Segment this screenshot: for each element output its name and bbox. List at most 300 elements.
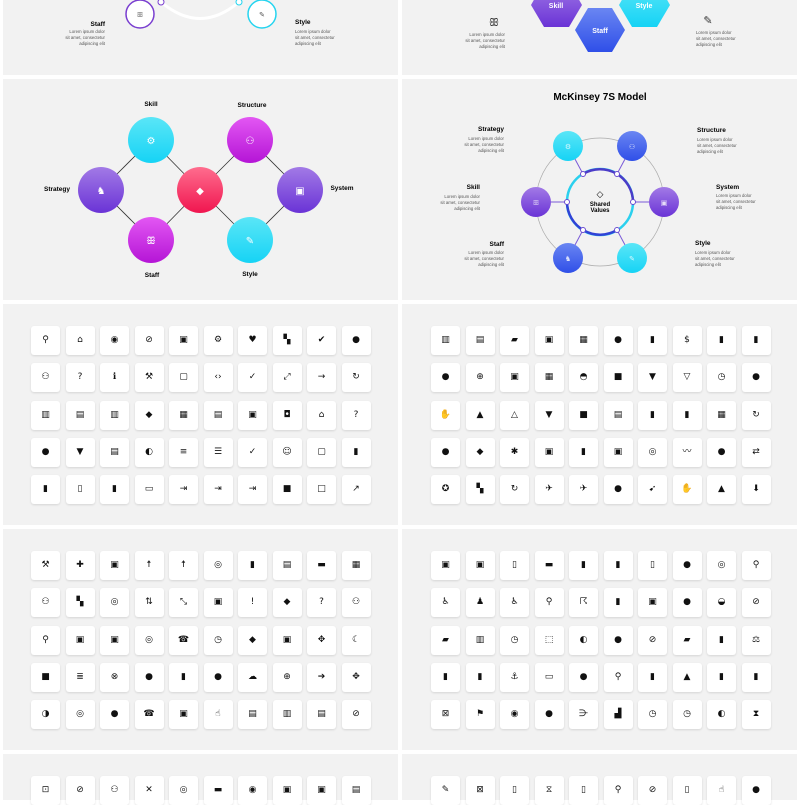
- icon grid 3: ☁: [248, 672, 257, 682]
- icon grid 2: ▣: [545, 335, 553, 345]
- icon grid 4: ▮: [616, 560, 620, 570]
- icon grid 4: ⚲: [615, 672, 621, 682]
- McKinsey 7S model: Lorem ipsum dolor: [468, 136, 505, 141]
- icon grid 5 partial: ▬: [214, 785, 222, 795]
- icon grid 1: ✓: [249, 447, 256, 457]
- icon grid 1: ▤: [214, 410, 222, 420]
- icon grid 3: ✚: [76, 560, 84, 570]
- icon grid 3: ✥: [318, 635, 325, 645]
- icon grid 2: ⬇: [752, 484, 760, 494]
- icon grid 1: ⌂: [77, 335, 83, 345]
- McKinsey 7S model: sit amet, consectetur: [464, 256, 505, 261]
- icon grid 1: ↗: [352, 484, 360, 494]
- icon grid 2: ▣: [545, 447, 553, 457]
- icon grid 1: ⚙: [214, 335, 222, 345]
- icon grid 1: ⊘: [145, 335, 153, 345]
- icon grid 2: ▮: [650, 410, 655, 420]
- network diagram: ◆: [196, 186, 204, 197]
- icon grid 3: ⊕: [283, 672, 291, 682]
- network diagram: Style: [242, 271, 258, 278]
- icon grid 2: ●: [614, 484, 622, 494]
- McKinsey 7S model: Style: [695, 240, 711, 247]
- McKinsey 7S model: Lorem ipsum dolor: [444, 194, 481, 199]
- icon grid 4: ▲: [684, 672, 690, 682]
- icon grid 2: ⊕: [476, 372, 484, 382]
- McKinsey 7S model: ♞: [565, 256, 571, 263]
- icon grid 1: ⇥: [180, 484, 187, 494]
- icon grid 1: ▤: [76, 410, 84, 420]
- icon grid 2: ▲: [477, 410, 483, 420]
- arc diagram partial: Staff: [91, 21, 106, 28]
- icon grid 3: ▣: [110, 560, 119, 570]
- icon grid 1: ⇥: [249, 484, 256, 494]
- icon grid 4: ●: [683, 560, 691, 570]
- icon grid 2: ▽: [684, 372, 690, 382]
- icon grid 2: ➹: [649, 484, 656, 494]
- icon grid 4: ⚲: [546, 597, 552, 607]
- icon grid 2: [430, 326, 772, 506]
- arc diagram partial: ꕥ: [137, 11, 143, 19]
- icon grid 3: ●: [214, 672, 222, 682]
- icon grid 4: ▰: [442, 635, 449, 645]
- icon grid 4: ⚖: [752, 635, 760, 645]
- icon grid 5 partial: ◉: [249, 785, 256, 795]
- panel: McKinsey 7S model: [402, 79, 797, 300]
- McKinsey 7S model: [440, 92, 756, 273]
- icon grid 2: ▰: [511, 335, 518, 345]
- McKinsey 7S model: System: [716, 184, 739, 191]
- icon grid 2: ●: [752, 372, 760, 382]
- icon grid 1: □: [317, 484, 326, 494]
- icon grid 3: ⇅: [145, 597, 153, 607]
- icon grid 2: △: [511, 410, 518, 420]
- icon grid 2: ↻: [752, 410, 760, 420]
- icon grid 5 partial: ▤: [352, 785, 360, 795]
- icon grid 2: ●: [614, 335, 622, 345]
- McKinsey 7S model: sit amet, consectetur: [695, 256, 735, 261]
- icon grid 4: ◒: [718, 597, 725, 607]
- icon grid 1: ■: [283, 484, 291, 494]
- McKinsey 7S model: Values: [590, 208, 610, 214]
- icon grid 2: ▣: [510, 372, 519, 382]
- icon grid 4: ▮: [443, 672, 448, 682]
- McKinsey 7S model: ◇: [597, 189, 604, 199]
- icon grid 3: ⊘: [352, 709, 360, 719]
- icon grid 4: ⊠: [442, 709, 449, 719]
- icon grid 2: ■: [579, 410, 588, 420]
- icon grid 1: ▼: [77, 447, 83, 457]
- McKinsey 7S model: adipiscing elit: [697, 149, 724, 154]
- diagrams svg: [44, 0, 756, 279]
- icon grid 3: ⚇: [352, 597, 360, 607]
- icon grid 2: ◓: [580, 372, 587, 382]
- icon grid 1: ●: [352, 335, 360, 345]
- icon grid 2: ◷: [718, 372, 725, 382]
- McKinsey 7S model: McKinsey 7S Model: [553, 92, 647, 103]
- icon grid 3: ⤡: [180, 597, 187, 607]
- panel: top-right partial hexagon diagram: [402, 0, 797, 75]
- icon grid 6 partial: ▯: [512, 785, 517, 795]
- hexagon diagram partial: adipiscing elit: [696, 42, 723, 47]
- network diagram: ✎: [246, 236, 254, 247]
- icon grid 4: ♟: [476, 597, 484, 607]
- icon grid 2: ▮: [719, 335, 724, 345]
- icon grid 4: ▯: [512, 560, 517, 570]
- icon grid 1: ▯: [78, 484, 82, 494]
- icon grid 2: ✱: [511, 447, 518, 457]
- icon grid 1: ⤢: [283, 372, 291, 382]
- icon grid 1: ♥: [248, 335, 257, 345]
- McKinsey 7S model: sit amet, consectetur: [697, 143, 737, 148]
- icon grid 5 partial: ◎: [180, 785, 187, 795]
- icon grid 1: [30, 326, 372, 506]
- icon grid 1: ◘: [283, 410, 291, 420]
- icon grid 1: ⚲: [42, 335, 49, 345]
- icon grid 3: ▣: [214, 597, 222, 607]
- icon grid 4: ▮: [478, 672, 482, 682]
- icon grid 4: ▮: [719, 635, 724, 645]
- icon grid 2: ▼: [546, 410, 552, 420]
- icon grid 1: ⇥: [214, 484, 222, 494]
- icon grid 5 partial: [30, 776, 372, 805]
- hexagon diagram partial: sit amet, consectetur: [465, 38, 506, 43]
- icon grid 4: ▥: [476, 635, 484, 645]
- McKinsey 7S model: Staff: [490, 241, 505, 248]
- icon grid 4: ▣: [441, 560, 450, 570]
- icon grid 2: ✈: [580, 484, 587, 494]
- McKinsey 7S model: adipiscing elit: [478, 262, 505, 267]
- icon grid 2: ⇄: [752, 447, 760, 457]
- McKinsey 7S model: Shared: [590, 202, 611, 208]
- icon grid 1: ▮: [43, 484, 48, 494]
- McKinsey 7S model: Lorem ipsum dolor: [468, 250, 505, 255]
- icon grid 3: ⊗: [111, 672, 118, 682]
- icon grid 6 partial: ✎: [442, 785, 449, 795]
- panel: top-left partial arc diagram: [3, 0, 398, 75]
- icon grid 1: ✔: [318, 335, 325, 345]
- icon grid 4: ☈: [579, 597, 588, 607]
- icon grid 6 partial: ⧖: [546, 785, 552, 795]
- icon grid 3: ◎: [76, 709, 84, 719]
- panel: icon grid 2: [402, 304, 797, 525]
- icon grid 4: ◎: [718, 560, 725, 570]
- arc diagram partial: adipiscing elit: [295, 41, 322, 46]
- icon grid 4: [430, 551, 772, 730]
- icon grid 4: ⊘: [649, 635, 656, 645]
- icon grid 1: ▦: [179, 410, 188, 420]
- icon grid 1: →: [318, 372, 325, 382]
- icon grid 5 partial: ✕: [145, 785, 153, 795]
- icon grid 4: ▬: [545, 560, 553, 570]
- icon grid 4: ▮: [650, 672, 655, 682]
- icon grid 2: ●: [718, 447, 725, 457]
- icon grid 4: ⬚: [545, 635, 553, 645]
- hexagon diagram partial: sit amet, consectetur: [696, 36, 736, 41]
- icon grid 2: ▮: [581, 447, 586, 457]
- McKinsey 7S model: adipiscing elit: [716, 205, 743, 210]
- icon grid 3: ▤: [248, 709, 257, 719]
- icon grid 2: ▮: [650, 335, 655, 345]
- icon grid 4: ▮: [719, 672, 724, 682]
- icon grid 3: ▮: [250, 560, 255, 570]
- arc diagram partial: sit amet, consectetur: [65, 35, 106, 40]
- icon grid 2: ▤: [476, 335, 484, 345]
- icon grid 3: ▣: [110, 635, 119, 645]
- McKinsey 7S model: ⚙: [565, 143, 571, 151]
- icon grid 3: [30, 551, 372, 730]
- panel: icon grid 1: [3, 304, 398, 525]
- icon grid 3: ☾: [352, 635, 360, 645]
- icon grid 3: ✥: [352, 672, 360, 682]
- icon grid 3: ●: [111, 709, 118, 719]
- icon grid 3: ▬: [317, 560, 326, 570]
- icon grid 1: ◆: [146, 410, 152, 420]
- icon grid 2: ▼: [649, 372, 656, 382]
- icon grid 1: ℹ: [113, 372, 116, 382]
- icon grid 2: ✋: [681, 484, 693, 494]
- icon grid 1: ▢: [179, 372, 188, 382]
- McKinsey 7S model: Skill: [467, 184, 480, 191]
- icon grid 1: ‹›: [214, 372, 222, 382]
- McKinsey 7S model: sit amet, consectetur: [440, 200, 481, 205]
- icon grid 3: ⚒: [41, 560, 50, 570]
- icon grid 4: ●: [614, 635, 622, 645]
- icon grid 1: ◐: [145, 447, 153, 457]
- arc diagram partial: ✎: [259, 12, 265, 19]
- icon grid 1: ▤: [110, 447, 119, 457]
- icon grid 5 partial: ⚇: [110, 785, 119, 795]
- icon grid 1: ▮: [112, 484, 117, 494]
- arc diagram partial: Lorem ipsum dolor: [69, 29, 106, 34]
- hexagon diagram partial: ✎: [703, 15, 713, 27]
- icon grid 4: ▯: [650, 560, 655, 570]
- icon grid 3: ▣: [179, 709, 188, 719]
- arc diagram partial: Lorem ipsum dolor: [295, 29, 331, 34]
- icon grid 3: !: [251, 597, 254, 607]
- icon grid 3: ◎: [111, 597, 118, 607]
- icon grid 3: ☎: [178, 635, 189, 645]
- icon grid 4: ◉: [511, 709, 518, 719]
- icon grid 1: ▣: [179, 335, 188, 345]
- icon grid 4: ▭: [545, 672, 553, 682]
- icon grid 3: ▚: [77, 597, 83, 607]
- icon grid 2: ▮: [754, 335, 758, 345]
- icon grid 1: ✓: [249, 372, 256, 382]
- icon grid 6 partial: ▯: [581, 785, 586, 795]
- hexagon diagram partial: adipiscing elit: [479, 44, 506, 49]
- icon grid 4: ⋺: [579, 709, 588, 719]
- icon grid 4: ▮: [616, 597, 620, 607]
- network diagram: [44, 101, 354, 279]
- icon grid 4: ⊘: [752, 597, 760, 607]
- icon grid 3: ☨: [147, 560, 151, 570]
- icon grid 4: ▰: [684, 635, 690, 645]
- icon grid 3: ▣: [283, 635, 291, 645]
- icon grid 3: ◷: [214, 635, 222, 645]
- network diagram: Skill: [144, 101, 158, 108]
- icon grid 1: ⚒: [145, 372, 153, 382]
- McKinsey 7S model: adipiscing elit: [695, 262, 722, 267]
- McKinsey 7S model: Structure: [697, 127, 726, 134]
- icon grid 3: ●: [145, 672, 153, 682]
- McKinsey 7S model: ꕥ: [533, 199, 539, 207]
- icon grid 3: ▣: [76, 635, 84, 645]
- McKinsey 7S model: ⚇: [629, 144, 635, 151]
- icon grid 2: ▮: [685, 410, 689, 420]
- network diagram: Strategy: [44, 186, 70, 193]
- icon grid 3: ▥: [283, 709, 291, 719]
- icon grid 6 partial: ▯: [685, 785, 689, 795]
- hexagon diagram partial: Style: [636, 3, 652, 10]
- icon grid 3: ⚇: [41, 597, 50, 607]
- network diagram: ▣: [295, 186, 305, 197]
- network diagram: ⚇: [246, 136, 255, 147]
- icon grid 2: 〰: [682, 447, 692, 457]
- icon grid 4: ◐: [580, 635, 587, 645]
- icon grid 6 partial: [430, 776, 772, 805]
- icon grid 2: ●: [442, 372, 449, 382]
- icon grid 4: ◷: [511, 635, 518, 645]
- icon grid 1: ⚇: [41, 372, 50, 382]
- icon grid 3: ☎: [143, 709, 155, 719]
- icon grid 1: ?: [78, 372, 82, 382]
- icon grid 3: ▤: [317, 709, 326, 719]
- icon grid 2: ▦: [579, 335, 588, 345]
- icon grid 2: ✪: [442, 484, 449, 494]
- icon grid 2: ✋: [440, 410, 451, 420]
- icon grid 4: ▟: [615, 709, 621, 719]
- icon grid 2: ■: [614, 372, 622, 382]
- hexagon diagram partial: Staff: [592, 28, 608, 35]
- icon grid 1: ☰: [214, 447, 222, 457]
- icon grid 6 partial: ⚲: [615, 785, 621, 795]
- icon grid 2: ▦: [717, 410, 726, 420]
- icon grid 1: ▥: [110, 410, 119, 420]
- icon grid 2: ▦: [545, 372, 553, 382]
- icon grid 2: ✈: [545, 484, 553, 494]
- icon grid 3: ☨: [181, 560, 186, 570]
- icon grid 3: ▤: [283, 560, 291, 570]
- icon grid 3: ◑: [42, 709, 49, 719]
- icon grid 2: ▚: [477, 484, 483, 494]
- icon grid 3: ▮: [181, 672, 186, 682]
- icon grid 1: ▥: [41, 410, 50, 420]
- icon grid 3: ☝: [215, 709, 221, 719]
- icon grid 4: ▣: [476, 560, 484, 570]
- McKinsey 7S model: ▣: [661, 200, 667, 207]
- icon grid 1: ▮: [354, 447, 358, 457]
- icon grid 1: ≡: [180, 447, 187, 457]
- icon grid 2: ◎: [649, 447, 656, 457]
- icon grid 3: ◎: [145, 635, 153, 645]
- panel: icon grid 3: [3, 529, 398, 750]
- network diagram: Staff: [145, 272, 160, 279]
- McKinsey 7S model: sit amet, consectetur: [464, 142, 505, 147]
- hexagon diagram partial: ꕥ: [489, 17, 499, 29]
- icon grid 5 partial: ▣: [283, 785, 291, 795]
- icon grid 4: ▣: [648, 597, 657, 607]
- McKinsey 7S model: Lorem ipsum dolor: [697, 137, 733, 142]
- network diagram: ♞: [97, 186, 105, 197]
- icon grid 1: ↻: [352, 372, 360, 382]
- icon grid 3: ◆: [249, 635, 256, 645]
- icon grid 3: ≣: [76, 672, 84, 682]
- icon grid 2: ◆: [477, 447, 483, 457]
- icon grid 4: ◷: [683, 709, 691, 719]
- arc diagram partial: sit amet, consectetur: [295, 35, 335, 40]
- McKinsey 7S model: Strategy: [478, 126, 504, 133]
- icon grid 1: ▭: [145, 484, 153, 494]
- icon grid 4: ▮: [581, 560, 586, 570]
- icon grid 6 partial: ⊠: [476, 785, 484, 795]
- McKinsey 7S model: Lorem ipsum dolor: [716, 193, 752, 198]
- hexagon diagram partial: [465, 0, 736, 52]
- icon grid 4: ♿: [441, 597, 450, 607]
- icon grid 3: ◎: [214, 560, 222, 570]
- icon grid 2: ●: [442, 447, 449, 457]
- panel: icon grid 4: [402, 529, 797, 750]
- hexagon diagram partial: Lorem ipsum dolor: [696, 30, 732, 35]
- arc diagram partial: [65, 0, 335, 46]
- icon grid 4: ⚓: [510, 672, 519, 682]
- icon grid 2: ↻: [511, 484, 518, 494]
- icon grid 1: ●: [42, 447, 49, 457]
- McKinsey 7S model: adipiscing elit: [478, 148, 505, 153]
- icon grid 4: ⚲: [753, 560, 759, 570]
- McKinsey 7S model: Lorem ipsum dolor: [695, 250, 731, 255]
- icon grid 6 partial: ⊘: [649, 785, 656, 795]
- panel: 7S network diagram: [3, 79, 398, 300]
- McKinsey 7S model: sit amet, consectetur: [716, 199, 756, 204]
- icon grid 1: ▢: [317, 447, 326, 457]
- network diagram: Structure: [238, 102, 267, 109]
- icon grid 3: ➔: [318, 672, 325, 682]
- icon grid 2: ▥: [441, 335, 450, 345]
- icon grid 6 partial: ☝: [719, 785, 724, 795]
- icon grid 2: ▲: [718, 484, 725, 494]
- icon grid 4: ●: [545, 709, 553, 719]
- icon grid 1: ☺: [282, 447, 292, 457]
- icon grid 4: ◐: [718, 709, 725, 719]
- arc diagram partial: Style: [295, 19, 311, 26]
- icon grid 1: ?: [354, 410, 358, 420]
- hexagon diagram partial: Lorem ipsum dolor: [469, 32, 506, 37]
- McKinsey 7S model: ✎: [629, 256, 635, 263]
- icon grid 3: ⚲: [42, 635, 49, 645]
- network diagram: System: [330, 185, 354, 192]
- icon grid 1: ◉: [111, 335, 118, 345]
- icon grid 4: ●: [683, 597, 691, 607]
- network diagram: ⚙: [147, 136, 155, 147]
- icon grid 4: ●: [580, 672, 587, 682]
- hexagon diagram partial: Skill: [549, 3, 563, 10]
- panel: icon grid 6 partial: [402, 754, 797, 800]
- icon grid 5 partial: ⊘: [76, 785, 84, 795]
- icon grid 2: $: [684, 335, 690, 345]
- icon grid 5 partial: ▣: [317, 785, 326, 795]
- icon grid 3: ▦: [352, 560, 360, 570]
- icon grid 1: ▚: [284, 335, 290, 345]
- icon grid 1: ▣: [248, 410, 257, 420]
- icon grid 6 partial: ●: [752, 785, 760, 795]
- icon grid 3: ?: [319, 597, 324, 607]
- icon grid 4: ▮: [754, 672, 758, 682]
- icon grid 1: ⌂: [319, 410, 324, 420]
- panel: icon grid 5 partial: [3, 754, 398, 800]
- icon grid 5 partial: ⊡: [42, 785, 49, 795]
- icon grid 2: ▣: [614, 447, 622, 457]
- icon grid 2: ▤: [614, 410, 622, 420]
